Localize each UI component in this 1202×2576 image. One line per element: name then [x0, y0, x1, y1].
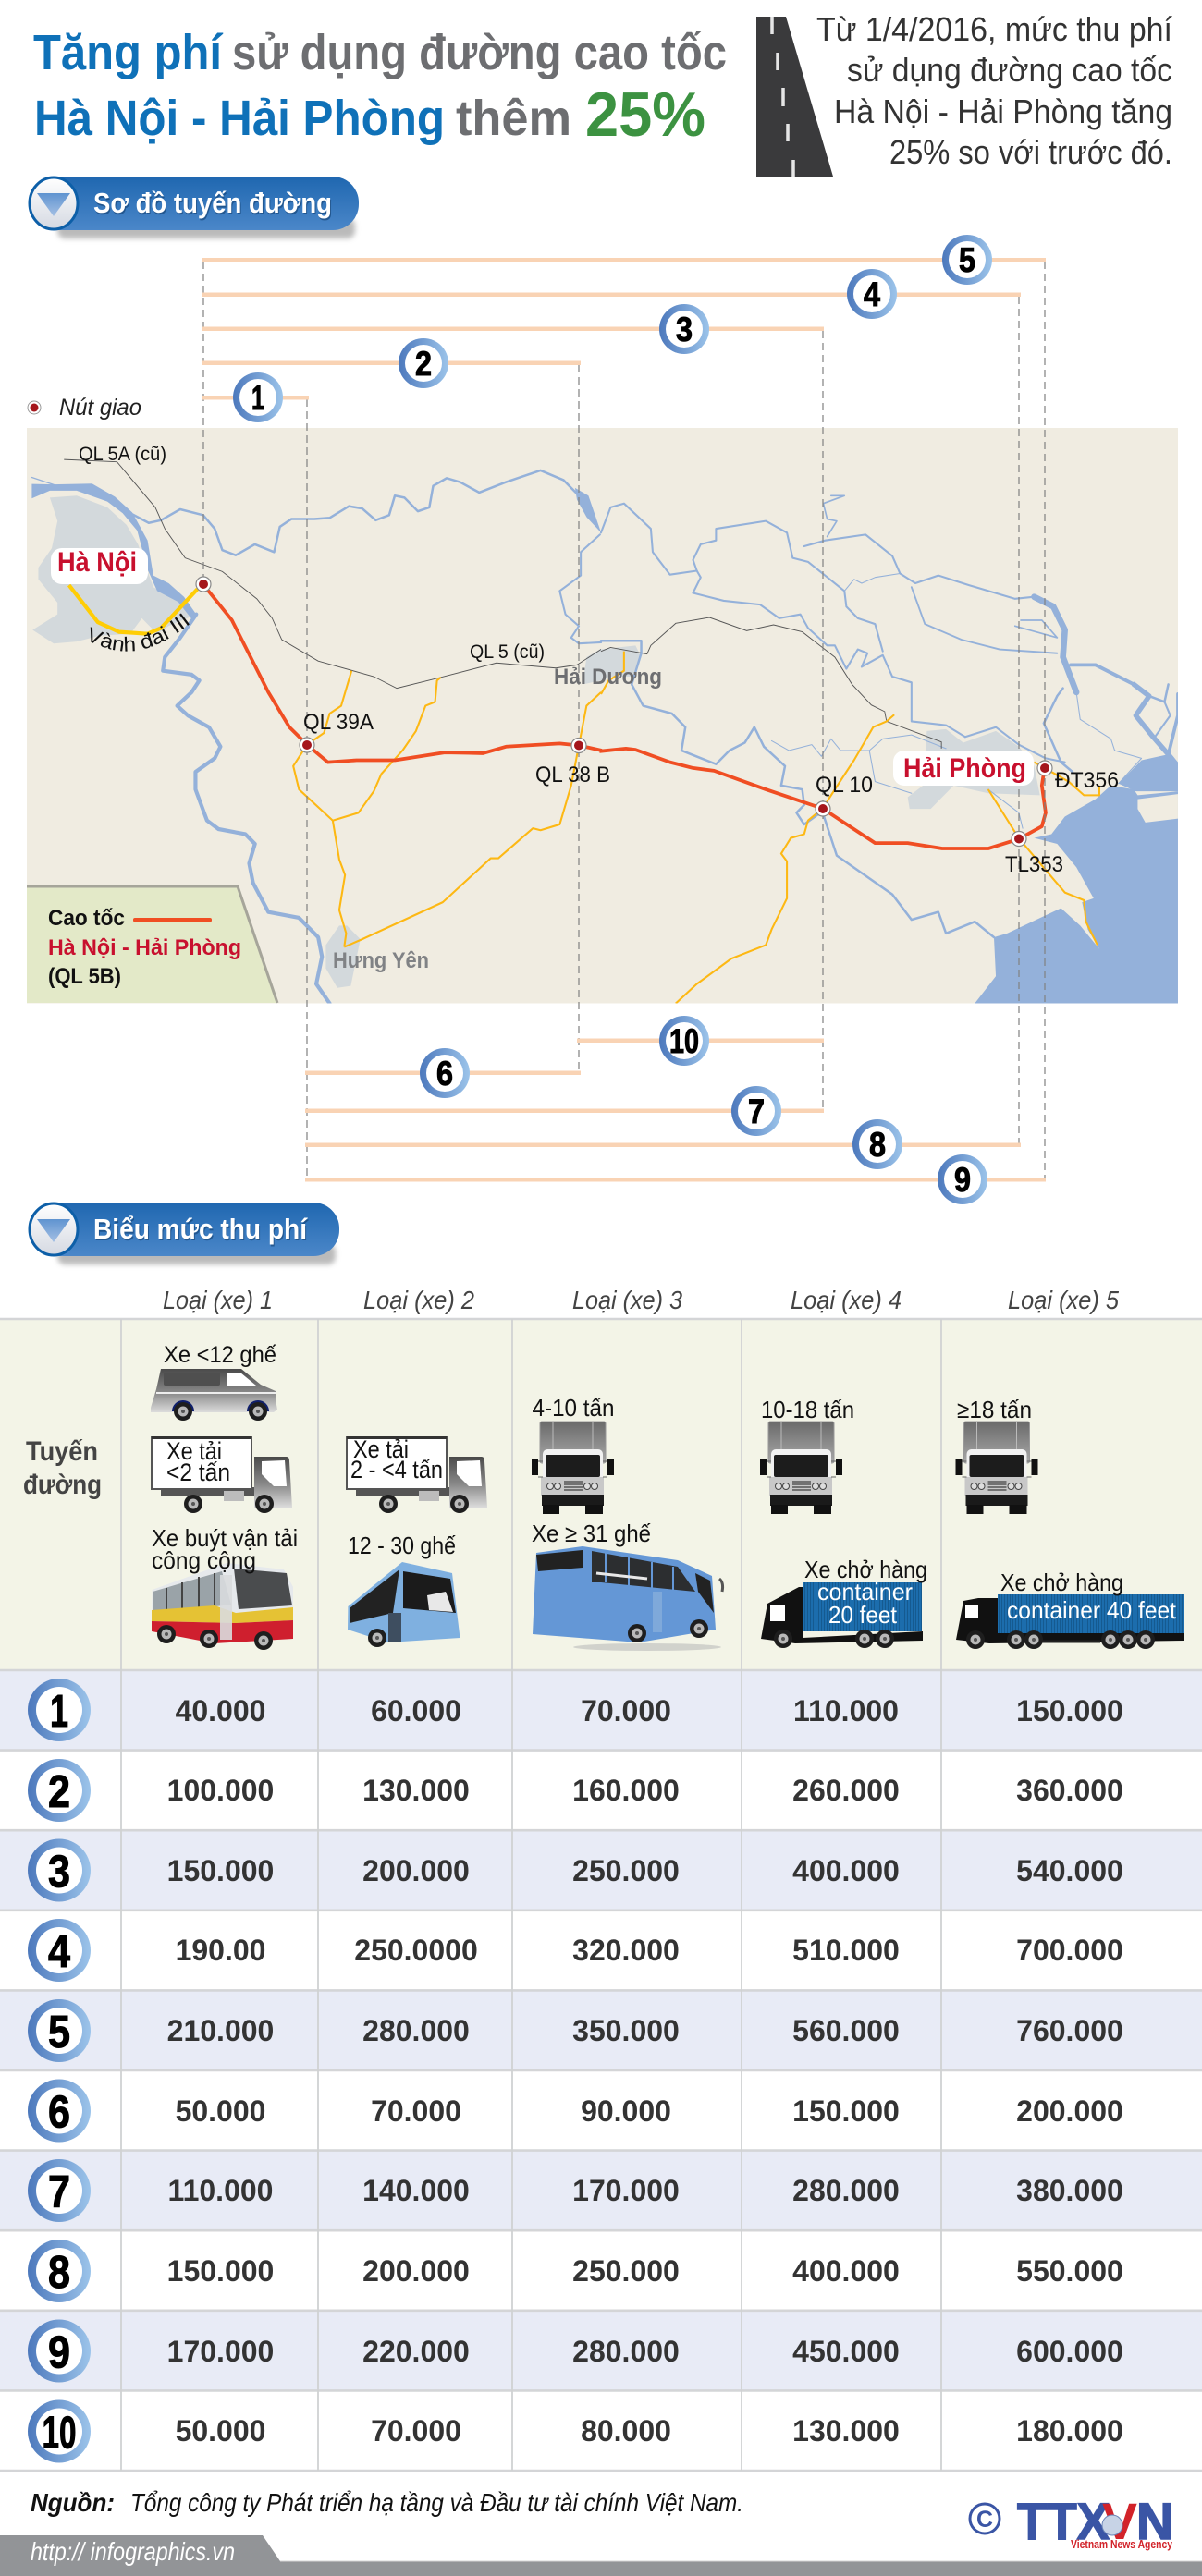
map label: Hai Duong: Hải Dương: [554, 665, 662, 690]
vehicle: bus 12 to 30 seats: 12 - 30 ghế: [348, 1532, 456, 1559]
table row 8: 250.000: [572, 2254, 680, 2288]
table column headers: Loại (xe) 4: [791, 1286, 902, 1314]
table row 8: 400.000: [792, 2254, 900, 2288]
route badge 3: [659, 304, 709, 354]
table row 9: 600.000: [1016, 2335, 1123, 2368]
table row 1: 1: [50, 1687, 68, 1737]
table column headers: Loại (xe) 5: [1008, 1286, 1119, 1314]
table row 2: 260.000: [792, 1774, 900, 1807]
intro text: 25% so với trước đó.: [889, 133, 1172, 171]
vehicle: public bus: [152, 1524, 298, 1650]
logo: TTXVN: [970, 2492, 1173, 2551]
table row 3: 3: [48, 1847, 70, 1897]
table row 7: 140.000: [362, 2174, 470, 2207]
section heading: toll table: Biểu mức thu phí: [94, 1215, 309, 1247]
vehicle: public bus: Xe buýt vận tải: [152, 1524, 298, 1552]
route badge 10: 10: [669, 1022, 699, 1060]
map label: QL 38 B: QL 38 B: [535, 763, 610, 787]
table row 6: 200.000: [1016, 2094, 1123, 2128]
table row 9: 9: [48, 2327, 70, 2377]
table row 7: [28, 2159, 1123, 2222]
table row 2: 100.000: [167, 1774, 274, 1807]
logo: TTXVN: V: [1102, 2492, 1137, 2550]
vehicle: 20 feet container truck: 20 feet: [828, 1601, 898, 1629]
vehicle: truck 10 to 18 tons: 10-18 tấn: [761, 1396, 854, 1423]
map label: Hung Yen: Hưng Yên: [333, 948, 429, 973]
map label: TL353: TL353: [1005, 852, 1063, 877]
row header: route: Tuyến: [26, 1436, 98, 1467]
section heading: toll table: [29, 1203, 339, 1264]
route badge 4: 4: [864, 275, 880, 313]
vehicle: 40 feet container truck: container 40 feet: [1007, 1596, 1177, 1624]
title: 25%: [585, 79, 705, 150]
table row 10: 80.000: [581, 2414, 671, 2448]
table row 9: 450.000: [792, 2335, 900, 2368]
section heading: route diagram: Sơ đồ tuyến đường: [94, 189, 333, 221]
junction markers: [196, 577, 1052, 847]
vehicle: truck 2 to 4 tons: [347, 1435, 487, 1513]
table row 6: 6: [48, 2087, 70, 2137]
map label: Hai Phong: Hải Phòng: [903, 753, 1026, 784]
footer band: http:// infographics.vn: [31, 2537, 235, 2566]
vehicle: 20 feet container truck: [761, 1556, 927, 1648]
map legend: (QL 5B): [48, 964, 121, 989]
table row 6: 150.000: [792, 2094, 900, 2128]
map label: QL 39A: QL 39A: [303, 710, 374, 735]
row header: route: đường: [23, 1470, 102, 1500]
table row 1: 60.000: [371, 1694, 461, 1728]
vehicle: bus 12 to 30 seats: [348, 1532, 460, 1647]
title: Tăng phí: [33, 25, 224, 80]
table row 9: 280.000: [572, 2335, 680, 2368]
section heading: route diagram: [29, 177, 359, 238]
vehicle: 20 feet container truck: Xe chở hàng: [804, 1556, 927, 1583]
logo: TTXVN: N: [1136, 2492, 1173, 2550]
table row 7: 170.000: [572, 2174, 680, 2207]
table row 1: 70.000: [581, 1694, 671, 1728]
table row 4: [28, 1919, 1123, 1982]
route badge 2: 2: [415, 345, 432, 383]
table row 2: 130.000: [362, 1774, 470, 1807]
map: left half geography: [31, 459, 602, 1004]
vehicle: 40 feet container truck: [956, 1569, 1184, 1649]
table row 4: 250.0000: [354, 1934, 478, 1967]
map: right half geography: [599, 495, 1178, 1004]
vehicle: public bus: công cộng: [152, 1546, 256, 1574]
intro text: sử dụng đường cao tốc: [847, 51, 1172, 89]
vehicle: coach over 31 seats: Xe ≥ 31 ghế: [532, 1520, 651, 1547]
intro text: Hà Nội - Hải Phòng tăng: [834, 92, 1172, 130]
table row 6: 90.000: [581, 2094, 671, 2128]
table row 10: 70.000: [371, 2414, 461, 2448]
map legend: Cao tốc: [48, 906, 125, 931]
table row 3: 200.000: [362, 1854, 470, 1887]
vehicle: truck over 18 tons: [956, 1396, 1037, 1514]
vehicle: 40 feet container truck: Xe chở hàng: [1000, 1569, 1123, 1596]
table row 10: 130.000: [792, 2414, 900, 2448]
icon: road: [756, 17, 833, 177]
map: [27, 428, 1178, 1004]
vehicle: truck 10 to 18 tons: [760, 1396, 854, 1514]
vehicle: truck under 2 tons: [152, 1436, 292, 1513]
title: sử dụng đường cao tốc: [232, 25, 727, 80]
vehicle: truck under 2 tons: <2 tấn: [166, 1459, 230, 1486]
table row 8: 8: [48, 2248, 70, 2298]
logo: TTXVN: C: [976, 2507, 993, 2533]
intro text: Từ 1/4/2016, mức thu phí: [816, 10, 1172, 48]
table row 7: 380.000: [1016, 2174, 1123, 2207]
table row 8: 550.000: [1016, 2254, 1123, 2288]
table row 5: [28, 1999, 1123, 2062]
logo: TTXVN: TTX: [1017, 2492, 1110, 2550]
table row 2: 360.000: [1016, 1774, 1123, 1807]
table row 6: 50.000: [176, 2094, 265, 2128]
map legend: Hà Nội - Hải Phòng: [48, 935, 241, 960]
table row 1: 40.000: [176, 1694, 265, 1728]
table row 3: 400.000: [792, 1854, 900, 1887]
vehicle: truck 2 to 4 tons: 2 - <4 tấn: [350, 1456, 443, 1483]
vehicle: truck under 2 tons: Xe tải: [166, 1437, 222, 1465]
vehicle: truck 4 to 10 tons: [532, 1394, 614, 1514]
footer band: [0, 2535, 1202, 2576]
table row 1: [28, 1679, 1123, 1741]
table row 1: 150.000: [1016, 1694, 1123, 1728]
map label: QL 10: QL 10: [816, 773, 873, 798]
title: [33, 25, 727, 150]
table row 4: 320.000: [572, 1934, 680, 1967]
table column headers: Loại (xe) 1: [163, 1286, 273, 1314]
table row 1: 110.000: [793, 1694, 899, 1728]
route badge 2: [399, 338, 448, 388]
route badge 8: 8: [869, 1126, 886, 1164]
table row 10: [28, 2399, 1123, 2462]
vehicle: truck 4 to 10 tons: 4-10 tấn: [533, 1394, 614, 1422]
route badge 7: 7: [748, 1093, 765, 1130]
table row 5: 5: [48, 2008, 70, 2057]
table row 3: 150.000: [167, 1854, 274, 1887]
table column headers: [163, 1286, 1119, 1314]
table row 7: 280.000: [792, 2174, 900, 2207]
map legend: [27, 885, 277, 1003]
route 1-10 guide dashes: [203, 262, 1045, 1179]
route lines: [202, 258, 1046, 1181]
table row 4: 190.00: [176, 1934, 265, 1967]
table row 4: 700.000: [1016, 1934, 1123, 1967]
map label: QL 5A: QL 5A (cũ): [79, 444, 166, 465]
section heading: toll table: Biểu mức thu phí: [93, 1213, 308, 1245]
table row 3: 540.000: [1016, 1854, 1123, 1887]
table row 3: [28, 1839, 1123, 1902]
source note: Tổng công ty Phát triển hạ tầng và Đầu tư tài chính Việt Nam.: [130, 2488, 743, 2517]
title: Hà Nội - Hải Phòng: [34, 91, 445, 146]
vehicle: van under 12 seats: Xe <12 ghế: [164, 1342, 276, 1368]
table row 6: 70.000: [371, 2094, 461, 2128]
table row 2: [28, 1759, 1123, 1822]
table row 8: 200.000: [362, 2254, 470, 2288]
source note: Nguồn:: [31, 2488, 115, 2517]
table column headers: Loại (xe) 2: [363, 1286, 474, 1314]
table row 5: 560.000: [792, 2014, 900, 2047]
table row 9: 170.000: [167, 2335, 274, 2368]
map label: Ha Noi: Hà Nội: [57, 547, 137, 578]
vehicle: truck over 18 tons: ≥18 tấn: [957, 1396, 1032, 1423]
table row 5: 280.000: [362, 2014, 470, 2047]
table row 7: 110.000: [168, 2174, 273, 2207]
logo: TTXVN: Vietnam News Agency: [1071, 2537, 1173, 2551]
route badge 5: [942, 235, 992, 285]
route badge 10: [659, 1016, 709, 1066]
title: thêm: [456, 91, 571, 146]
table row 9: 220.000: [362, 2335, 470, 2368]
table row 2: 2: [48, 1767, 70, 1817]
table background: [0, 1319, 1202, 2471]
table row 10: 50.000: [176, 2414, 265, 2448]
map label: QL 5: QL 5 (cũ): [470, 641, 545, 663]
table row 5: 760.000: [1016, 2014, 1123, 2047]
table row 9: [28, 2320, 1123, 2383]
table row 4: 4: [48, 1927, 70, 1977]
table row 2: 160.000: [572, 1774, 680, 1807]
table row 8: [28, 2240, 1123, 2302]
row header: route: [23, 1436, 102, 1500]
table column headers: Loại (xe) 3: [572, 1286, 682, 1314]
vehicle: truck 2 to 4 tons: Xe tải: [353, 1435, 409, 1463]
vehicle: coach over 31 seats: [532, 1520, 723, 1651]
route badge 1: [233, 372, 283, 422]
route badge 9: 9: [954, 1161, 971, 1199]
route badge 3: 3: [676, 311, 693, 348]
vehicle: 20 feet container truck: container: [817, 1578, 913, 1605]
map label: DT356: ĐT356: [1055, 768, 1119, 793]
route badge 7: [731, 1086, 781, 1136]
table row 4: 510.000: [792, 1934, 900, 1967]
intro text: [816, 10, 1172, 171]
route badge 9: [938, 1154, 987, 1204]
map label: ring road III: Vành đai III: [91, 614, 190, 652]
legend: junction: Nút giao: [59, 395, 141, 421]
section heading: route diagram: Sơ đồ tuyến đường: [93, 187, 332, 219]
vehicle: van under 12 seats: [151, 1342, 277, 1421]
table row 6: [28, 2080, 1123, 2143]
table row 5: 210.000: [167, 2014, 274, 2047]
table row 8: 150.000: [167, 2254, 274, 2288]
route badge 6: 6: [436, 1055, 453, 1093]
table row 10: 10: [43, 2409, 76, 2459]
table row 3: 250.000: [572, 1854, 680, 1887]
route badge 6: [420, 1048, 470, 1098]
route badge 8: [852, 1119, 902, 1169]
route badge 5: 5: [959, 241, 975, 279]
table row 5: 350.000: [572, 2014, 680, 2047]
table row 10: 180.000: [1016, 2414, 1123, 2448]
route badge 1: 1: [251, 379, 264, 417]
table row 7: 7: [48, 2167, 70, 2217]
route badge 4: [847, 269, 897, 319]
